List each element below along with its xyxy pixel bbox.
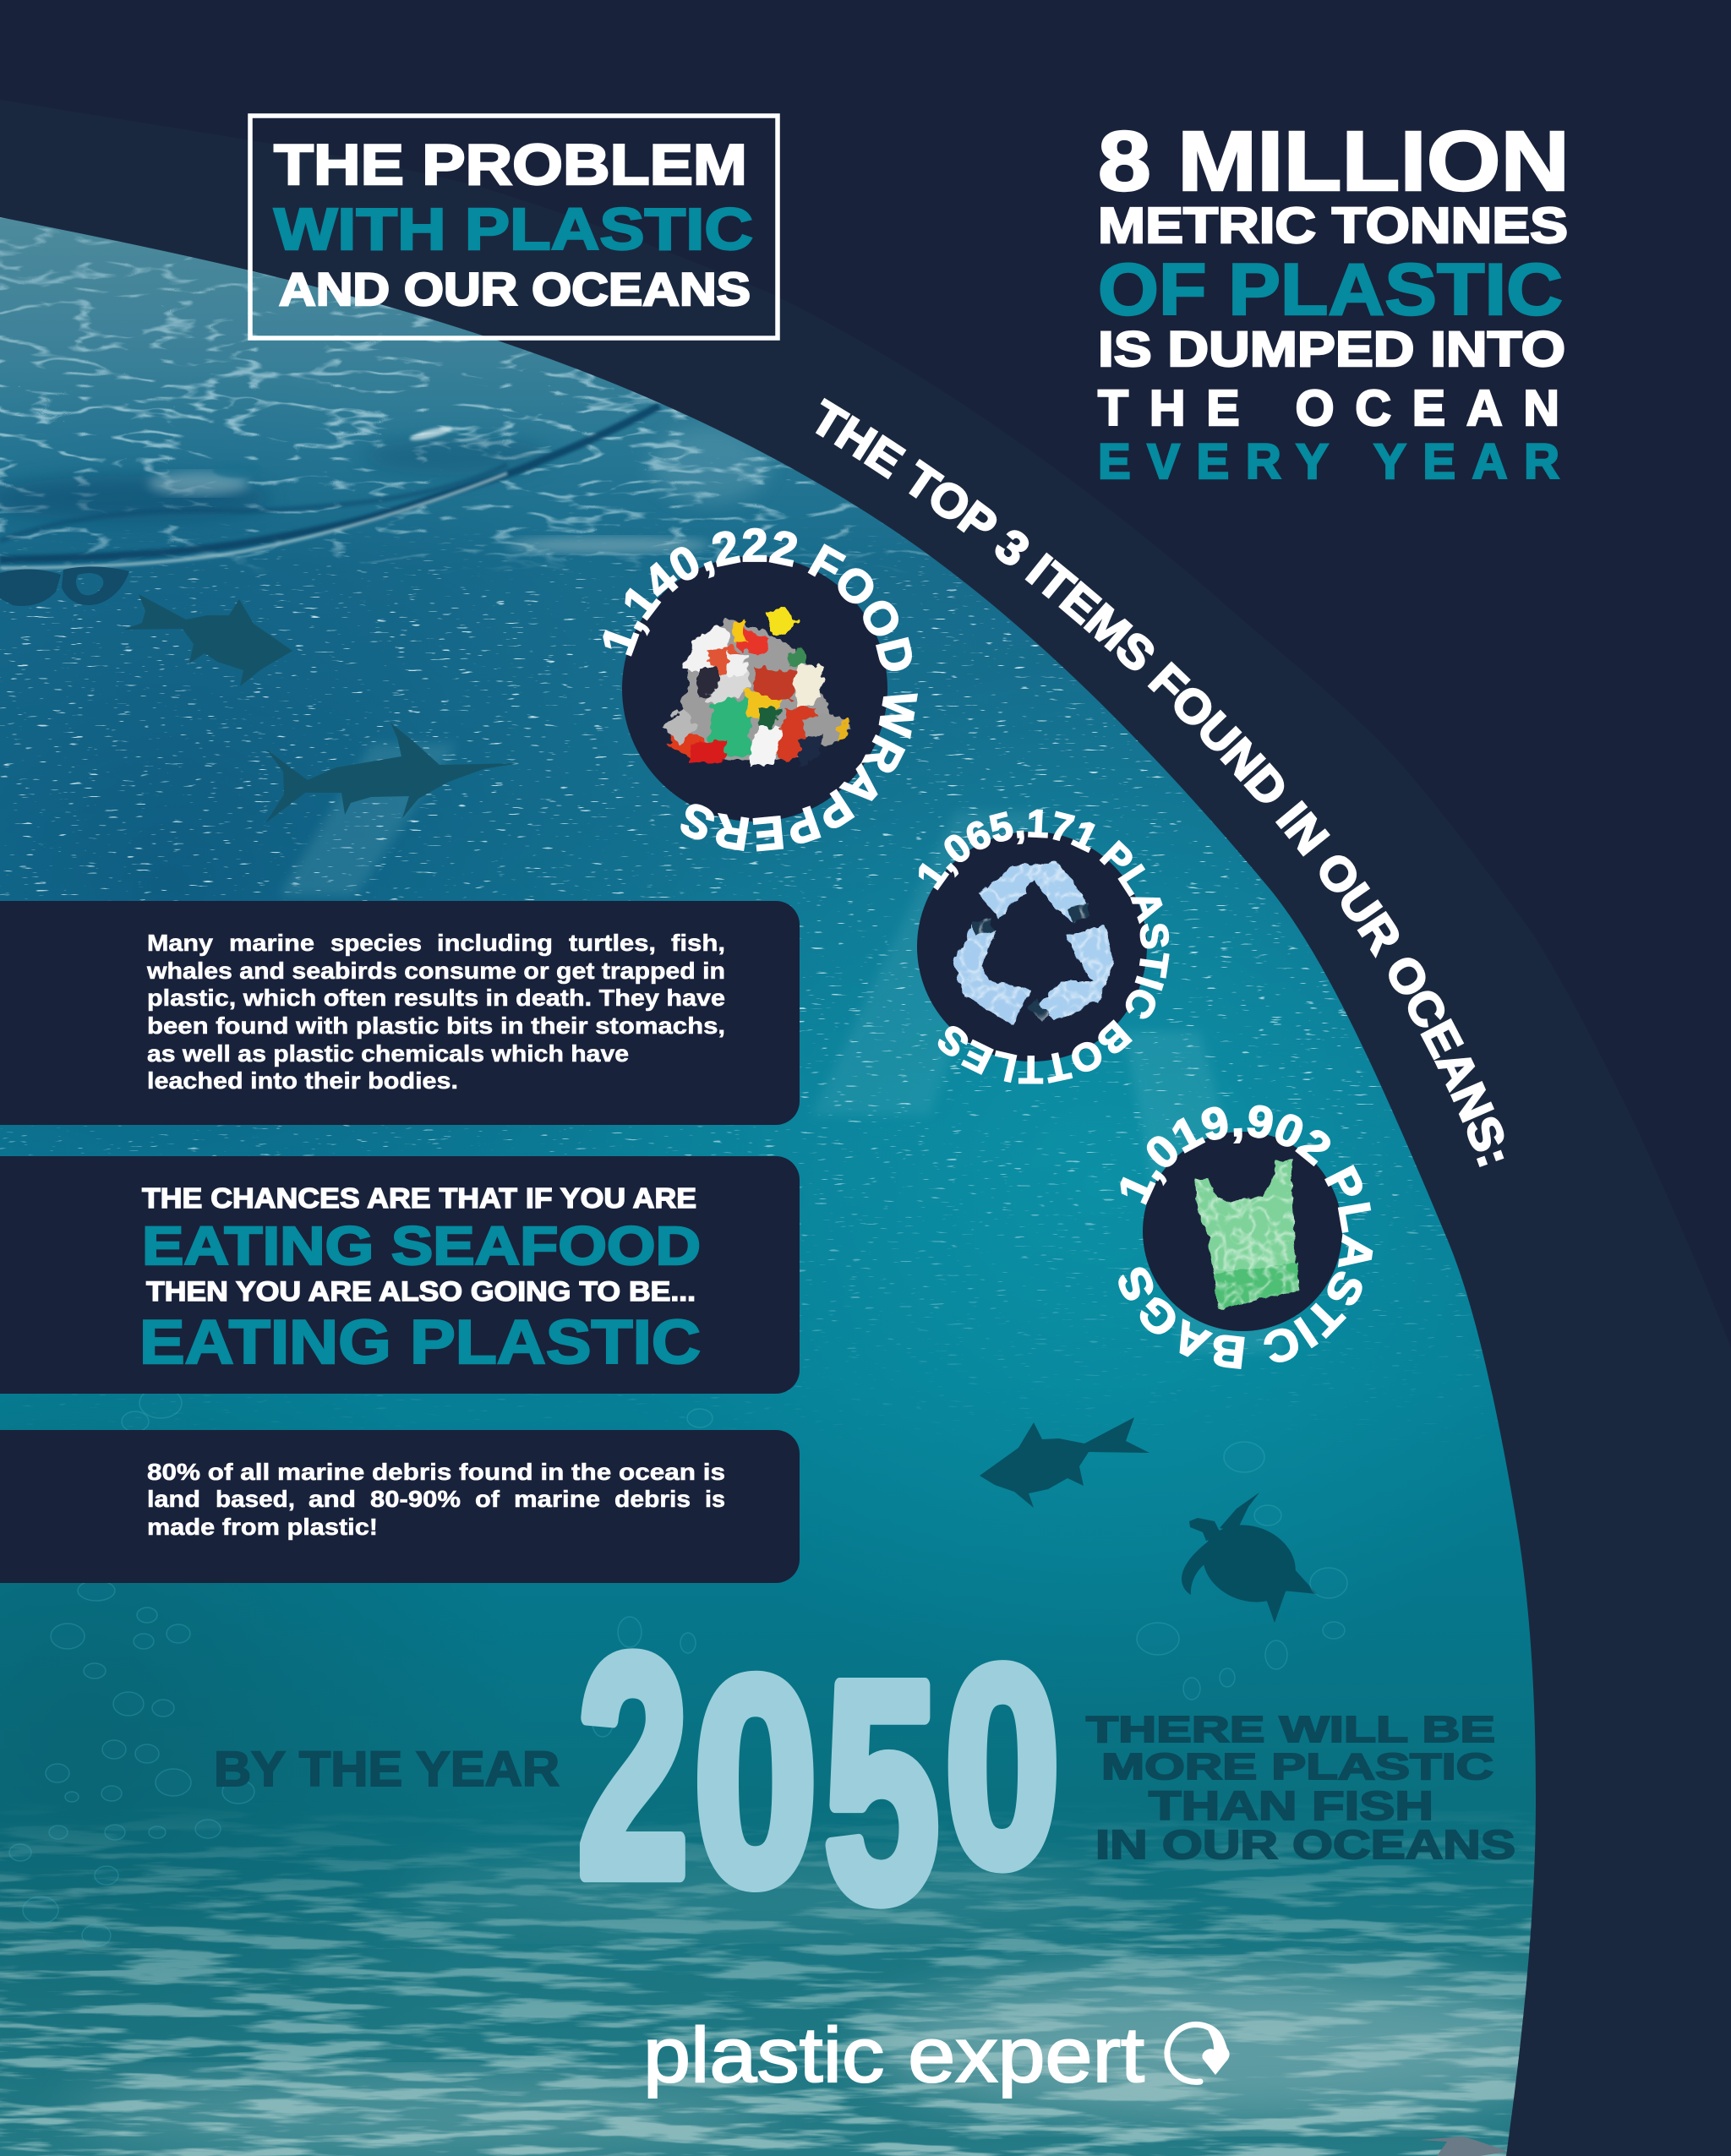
headline statistic: OF PLASTIC [1098,249,1563,330]
item 2: plastic bottles [917,810,1170,1083]
circle badge [1143,1132,1342,1331]
circle badge [917,832,1147,1062]
statement: more plastic than fish [1086,1709,1515,1868]
paragraph: marine debris: of [475,1486,500,1512]
statement: more plastic than fish: THERE WILL BE [1086,1709,1495,1750]
bubbles [9,1388,1347,1946]
paragraph: marine debris: and [309,1486,356,1512]
big number 2050 [578,1591,1060,1964]
icon: three crushed bottles in recycling triangle [953,860,1111,1023]
big number 2050: 0 [694,1618,817,1945]
big number 2050: 5 [824,1618,939,1964]
item 3: plastic bags [1118,1105,1373,1369]
statement: more plastic than fish: IN OUR OCEANS [1095,1823,1515,1868]
paragraph: marine species: including [437,930,553,956]
callout text: THEN YOU ARE ALSO GOING TO BE... [146,1276,696,1307]
icon: pile of food wrappers [663,606,852,767]
circle badge [622,556,887,821]
title frame [250,116,778,338]
paragraph: marine debris: is [705,1486,725,1512]
paragraph: marine species: leached into their bodies. [147,1067,458,1094]
headline statistic: EVERY YEAR [1098,434,1559,489]
statement: more plastic than fish: THAN FISH [1149,1784,1433,1829]
paragraph: marine species: species [330,930,422,956]
paragraph: marine species: as well as plastic chemicals which have [147,1040,629,1067]
paragraph: marine debris [147,1459,725,1540]
paragraph: marine debris: made from plastic! [147,1514,378,1540]
title text: AND OUR OCEANS [279,263,751,315]
panel: eating seafood callout [0,1156,800,1394]
paragraph: marine debris: debris [614,1486,691,1512]
paragraph: marine species: whales and seabirds consume or get trapped in [146,958,725,984]
paragraph: marine species: plastic, which often results in death. They have [147,985,725,1011]
panel: marine species [0,901,800,1125]
callout text: EATING SEAFOOD [142,1215,701,1276]
icon: fish silhouette lower [980,1417,1149,1508]
paragraph: marine debris: 80-90% [370,1486,461,1512]
ocean globe with underwater scene [0,217,1536,2156]
icon: recycling arrow [1167,2022,1230,2082]
headline statistic: METRIC TONNES [1098,198,1568,254]
paragraph: marine debris: 80% of all marine debris found in the ocean is [147,1459,725,1485]
curved heading: top 3 items: THE TOP 3 ITEMS FOUND IN OUR OCEANS: [815,397,1504,1167]
callout text [139,1182,701,1377]
by the year label: BY THE YEAR [214,1742,560,1797]
title text: WITH PLASTIC [274,196,753,262]
wordmark: plastic expert [643,2012,1144,2099]
statement: more plastic than fish: MORE PLASTIC [1101,1746,1493,1788]
panel: marine debris [0,1430,800,1583]
item 1: food wrappers [603,527,918,852]
curved label: 1,140,222 FOOD WRAPPERS [603,527,918,852]
title box [250,116,778,338]
paragraph: marine debris: land [147,1486,200,1512]
curved label: 1,019,902 PLASTIC BAGS [1118,1105,1373,1369]
paragraph: marine species: marine [229,930,314,956]
paragraph: marine species: Many [147,930,213,956]
big number 2050: 2 [578,1591,688,1941]
icon: diver goggles seen from below [0,566,129,606]
paragraph: marine species: been found with plastic bits in their stomachs, [147,1013,725,1039]
paragraph: marine debris: based, [216,1486,295,1512]
headline statistic: IS DUMPED INTO [1098,322,1565,377]
callout text: THE CHANCES ARE THAT IF YOU ARE [142,1182,696,1214]
paragraph: marine debris: marine [514,1486,600,1512]
headline statistic: THE OCEAN [1098,380,1559,436]
title text [274,133,753,315]
icon: sea turtle silhouette [1182,1493,1317,1623]
brand logo [643,2012,1230,2099]
curved label: 1,065,171 PLASTIC BOTTLES [918,810,1170,1083]
icon: shark silhouette upper [123,594,292,686]
callout text: EATING PLASTIC [139,1308,701,1377]
big number 2050: 0 [945,1609,1060,1924]
paragraph: marine species: fish, [671,930,725,956]
paragraph: marine species: turtles, [569,930,656,956]
paragraph: marine species [146,930,725,1094]
headline statistic [1098,114,1570,489]
icon: green plastic bag [1193,1158,1297,1308]
title text: THE PROBLEM [274,133,747,197]
headline statistic: 8 MILLION [1098,114,1570,209]
icon: swordfish silhouette [265,723,518,823]
